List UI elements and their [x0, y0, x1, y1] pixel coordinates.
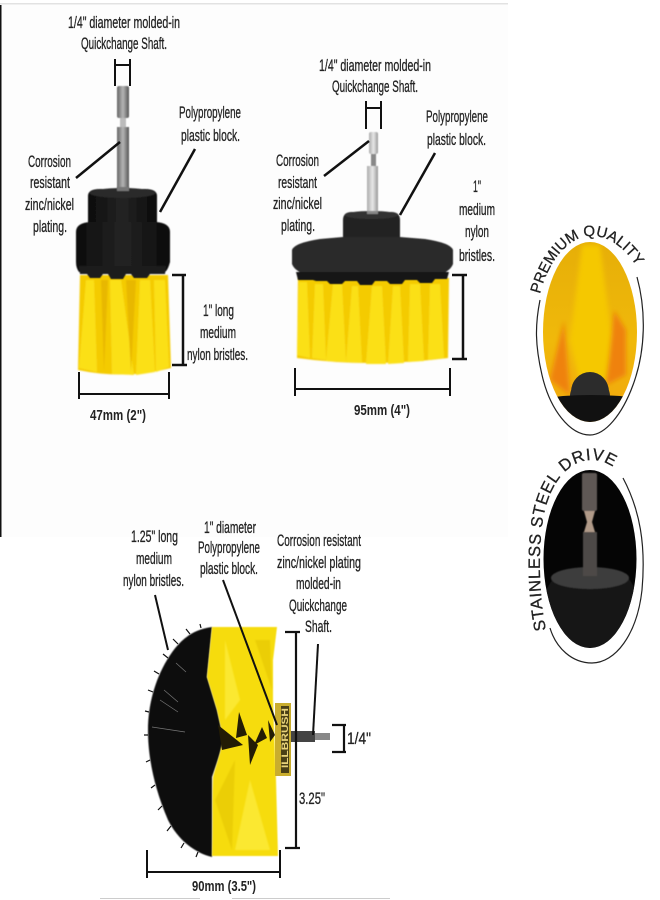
label: polypropylene block: Polypropylene	[198, 538, 260, 557]
heading: shaft diameter	[68, 13, 180, 53]
bracket: bristle length	[172, 275, 187, 365]
label: height: 3.25"	[299, 789, 325, 808]
label: polypropylene block: Polypropylene	[179, 103, 241, 122]
label: shaft size: 1/4"	[347, 729, 371, 748]
icon: collar and shaft: ILLBRUSH	[280, 708, 290, 768]
label: bristle length: medium	[136, 549, 172, 568]
bracket: height	[285, 632, 300, 848]
label: corrosion resistant: Corrosion	[276, 151, 319, 170]
label: corrosion resistant: resistant	[30, 173, 70, 192]
label: polypropylene block: plastic block.	[427, 130, 486, 149]
heading: shaft diameter: 1/4" diameter molded-in	[319, 56, 431, 75]
label: bristle length: nylon	[465, 222, 489, 241]
label: polypropylene block: Polypropylene	[426, 107, 488, 126]
icon: drive close-up	[540, 468, 640, 650]
arrow: bristle leader	[155, 595, 168, 650]
label: corrosion resistant: Quickchange	[289, 596, 347, 615]
label: bristle length: bristles.	[459, 246, 495, 265]
icon: brush 2 shaft	[367, 132, 378, 214]
label: corrosion resistant: zinc/nickel plating	[277, 553, 361, 572]
label: corrosion resistant: plating.	[281, 216, 315, 235]
heading: shaft diameter: 1/4" diameter molded-in	[68, 13, 180, 32]
arrow: corrosion leader	[324, 141, 369, 176]
panel: premium quality badge	[530, 226, 645, 436]
label: corrosion resistant: Corrosion resistant	[277, 531, 361, 550]
bracket: width	[147, 850, 280, 878]
label: polypropylene block: plastic block.	[200, 559, 258, 578]
label: corrosion resistant: Shaft.	[305, 617, 332, 636]
icon: bristle close-up	[543, 242, 637, 422]
icon: stainless arc	[550, 478, 643, 663]
icon: brush 2 bristles	[297, 278, 449, 364]
arrow: corrosion leader	[76, 142, 120, 178]
icon: brush 2 body	[292, 211, 453, 285]
photo area backdrop	[1, 4, 508, 537]
panel: 3.5 inch round brush	[123, 518, 371, 895]
label: corrosion resistant: Corrosion	[28, 152, 71, 171]
icon: black bristles	[144, 624, 223, 857]
label: corrosion resistant: resistant	[278, 173, 317, 192]
panel: 4 inch disc brush	[273, 56, 495, 419]
bracket: width	[295, 368, 450, 396]
bracket: shaft	[332, 725, 346, 752]
icon: yellow bristles	[207, 627, 278, 856]
icon: collar and shaft	[275, 703, 330, 776]
label: bristle length: medium	[459, 200, 495, 219]
bracket: bristle length	[452, 275, 467, 359]
label: width: 95mm (4")	[354, 402, 410, 419]
icon: brush 1 body	[76, 187, 170, 279]
label: bristle length: nylon bristles.	[123, 571, 184, 590]
label: corrosion resistant: zinc/nickel	[25, 195, 74, 214]
bracket: width	[79, 372, 169, 399]
panel: stainless steel badge	[528, 448, 644, 664]
label: corrosion resistant: zinc/nickel	[273, 194, 322, 213]
label: corrosion resistant: molded-in	[296, 574, 341, 593]
label: polypropylene block: plastic block.	[181, 126, 240, 145]
label: width: 47mm (2")	[90, 407, 146, 424]
label: bristle length: 1" long	[203, 301, 234, 320]
arrow: polypropylene leader	[400, 153, 435, 215]
label: bristle length: 1"	[473, 177, 481, 196]
label: bristle length: nylon bristles.	[187, 345, 248, 364]
icon: premium arc	[536, 277, 643, 435]
arrow: polypropylene leader	[160, 149, 195, 212]
label: bristle length: medium	[200, 323, 236, 342]
label: width: 90mm (3.5")	[192, 878, 256, 895]
heading: premium quality: PREMIUM QUALITY	[530, 226, 645, 293]
label: corrosion resistant: plating.	[33, 217, 67, 236]
label: bristle length: 1.25" long	[131, 527, 178, 546]
arrow: block leader	[223, 580, 277, 725]
heading: shaft diameter: Quickchange Shaft.	[81, 34, 167, 53]
bracket: shaft width	[366, 101, 381, 129]
arrow: corrosion leader	[313, 644, 318, 735]
icon: brush 1 shaft	[117, 86, 129, 190]
heading: stainless steel drive: STAINLESS STEEL DRIVE	[528, 448, 618, 630]
heading: shaft diameter: Quickchange Shaft.	[332, 77, 418, 96]
bracket: shaft width	[115, 59, 130, 86]
heading: shaft diameter	[319, 56, 431, 96]
panel: small 2 inch brush	[25, 13, 248, 424]
label: polypropylene block: 1" diameter	[204, 518, 256, 537]
icon: brush 1 bristles	[78, 275, 171, 375]
